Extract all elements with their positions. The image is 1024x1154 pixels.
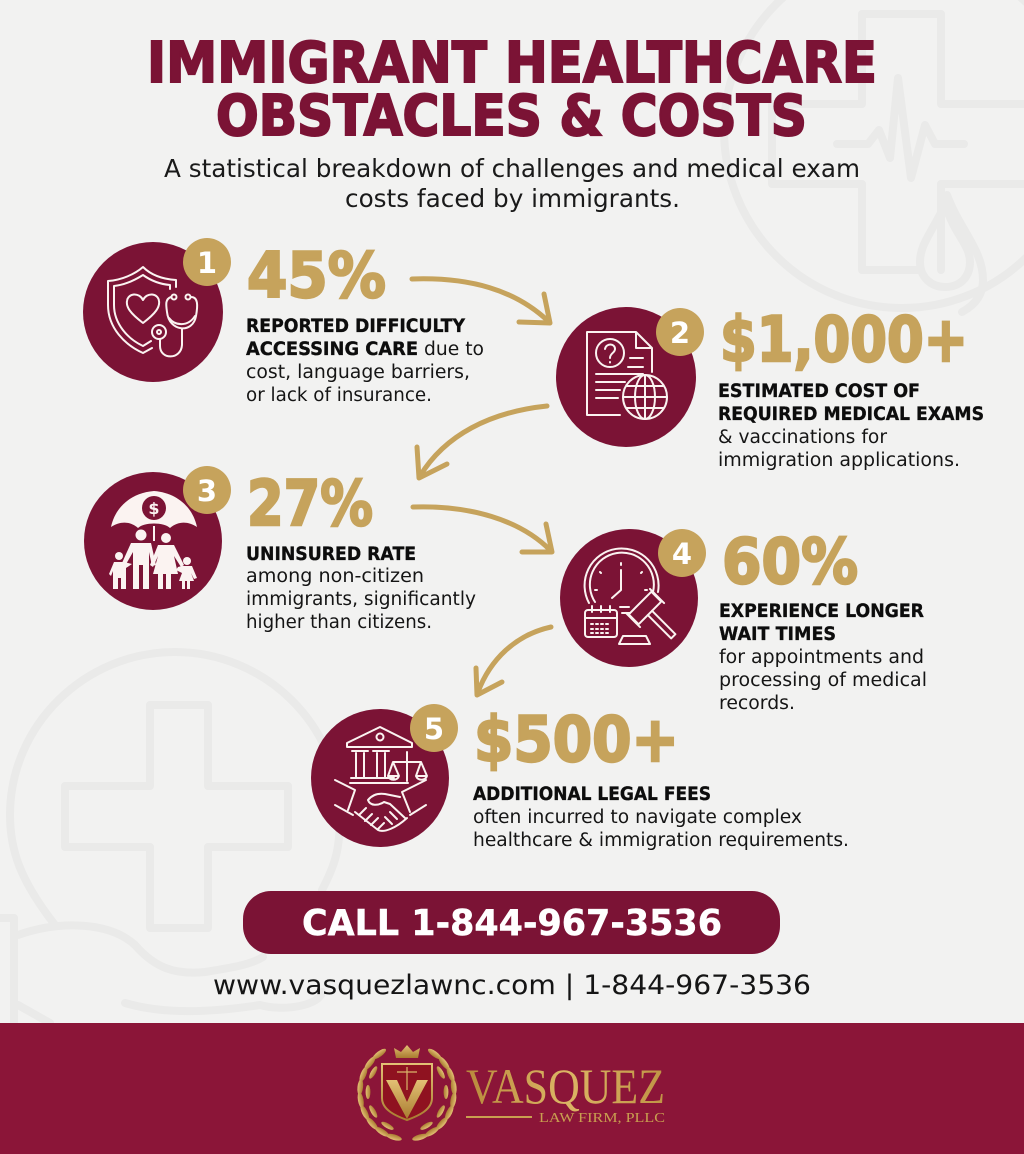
badge 2 xyxy=(656,308,704,356)
description: due to xyxy=(424,339,484,360)
description xyxy=(246,544,476,633)
subtitle: costs faced by immigrants. xyxy=(345,184,680,213)
arrow: step 1 to 2 xyxy=(412,279,550,323)
description: REPORTED DIFFICULTY xyxy=(246,316,466,337)
description: & vaccinations for xyxy=(718,427,887,448)
number: $500+ xyxy=(474,703,679,776)
call to action button: CALL 1-844-967-3536 xyxy=(302,903,722,944)
description: healthcare & immigration requirements. xyxy=(473,830,849,851)
description: immigration applications. xyxy=(718,450,960,471)
badge 1: 1 xyxy=(197,246,217,280)
description: cost, language barriers, xyxy=(246,362,470,383)
description: UNINSURED RATE xyxy=(246,544,416,565)
badge 3 xyxy=(183,466,231,514)
footer band xyxy=(0,1023,1024,1154)
badge 1 xyxy=(183,238,231,286)
number: $1,000+ xyxy=(720,303,968,376)
description: REQUIRED MEDICAL EXAMS xyxy=(718,404,984,425)
description xyxy=(246,316,484,406)
description xyxy=(718,381,984,471)
arrow: step 3 to 4 xyxy=(413,507,552,552)
subtitle xyxy=(164,154,860,213)
icon: document and globe xyxy=(556,307,696,447)
watermark: hand holding cross bottom left xyxy=(0,652,340,1023)
description: or lack of insurance. xyxy=(246,385,432,406)
icon: family under umbrella: $ xyxy=(148,499,160,518)
call to action button xyxy=(243,891,780,954)
number: 60% xyxy=(722,525,858,598)
icon: family under umbrella xyxy=(84,472,222,610)
description: processing of medical xyxy=(719,670,927,691)
icon: courthouse, scales and handshake xyxy=(311,709,449,847)
description: ACCESSING CARE xyxy=(246,339,418,360)
subtitle: A statistical breakdown of challenges and medical exam xyxy=(164,154,860,183)
panel: stat 5 xyxy=(311,703,849,851)
badge 5: 5 xyxy=(424,712,444,746)
description: records. xyxy=(719,693,795,714)
badge 4 xyxy=(658,529,706,577)
badge 4: 4 xyxy=(672,537,692,571)
contact line: www.vasquezlawnc.com | 1-844-967-3536 xyxy=(213,970,811,1001)
description: ESTIMATED COST OF xyxy=(718,381,920,402)
title xyxy=(147,31,877,149)
icon: clock, calendar and gavel xyxy=(560,529,698,667)
description: for appointments and xyxy=(719,647,924,668)
badge 3: 3 xyxy=(197,474,217,508)
panel: stat 3 xyxy=(84,466,476,633)
title: IMMIGRANT HEALTHCARE xyxy=(147,31,877,96)
icon: shield and stethoscope xyxy=(83,242,223,382)
description xyxy=(473,784,849,851)
badge 2: 2 xyxy=(670,316,690,350)
number: 45% xyxy=(247,239,386,312)
arrow: step 4 to 5 xyxy=(476,627,551,695)
description: among non-citizen xyxy=(246,566,424,587)
panel: stat 1 xyxy=(83,238,484,406)
panel: stat 4 xyxy=(560,525,927,714)
logo wordmark: VASQUEZ xyxy=(466,1058,665,1114)
description: often incurred to navigate complex xyxy=(473,807,802,828)
description: EXPERIENCE LONGER xyxy=(719,601,924,622)
logo: Vasquez Law Firm crest xyxy=(357,1045,457,1142)
description: immigrants, significantly xyxy=(246,589,476,610)
arrow: step 2 to 3 xyxy=(417,406,547,478)
description: WAIT TIMES xyxy=(719,624,836,645)
number: 27% xyxy=(247,467,373,540)
panel: stat 2 xyxy=(556,303,984,471)
badge 5 xyxy=(410,704,458,752)
watermark: medical cross top right xyxy=(724,0,1024,312)
description: higher than citizens. xyxy=(246,612,432,633)
description: ADDITIONAL LEGAL FEES xyxy=(473,784,711,805)
title: OBSTACLES & COSTS xyxy=(216,84,807,149)
logo wordmark: LAW FIRM, PLLC xyxy=(539,1111,665,1126)
description xyxy=(719,601,927,714)
